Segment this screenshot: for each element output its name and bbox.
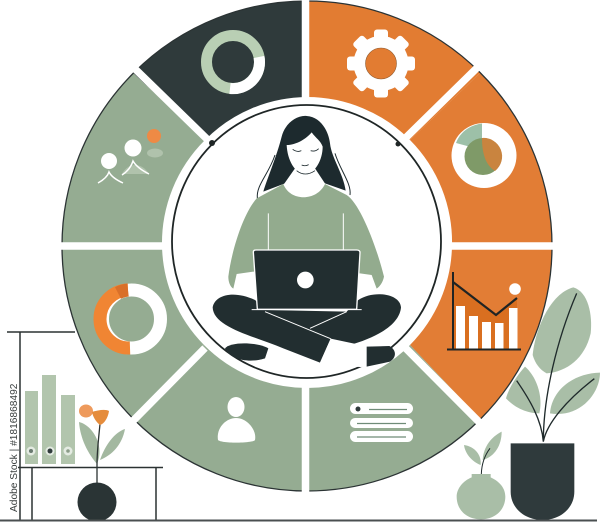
legs: [213, 294, 401, 363]
icon: orange segment donut pie: [452, 123, 516, 188]
bare foot: [320, 339, 368, 367]
flower stem: [97, 424, 100, 483]
large leaf: [533, 287, 591, 373]
face features: [293, 149, 319, 174]
leg fold lines: [265, 312, 347, 339]
icon: people: [98, 129, 163, 183]
segment: green bottom right: [307, 345, 480, 491]
right shoe: [367, 346, 395, 367]
icon: person: [218, 397, 255, 443]
watermark id text: Adobe Stock | #1816868492: [9, 383, 20, 512]
icon: donut left: [100, 290, 160, 348]
binder labels: [26, 446, 72, 456]
flower leaves: [79, 422, 99, 464]
woman with laptop: [213, 116, 401, 367]
large pot: [511, 443, 574, 520]
segment: orange upper right: [410, 73, 552, 246]
white separators: [55, 0, 560, 496]
laptop: [252, 250, 362, 310]
small vase: [457, 474, 505, 519]
icon: list rows: [350, 403, 413, 442]
inner circle: [172, 105, 441, 378]
neck and face: [283, 132, 326, 197]
left leaf: [506, 367, 540, 413]
hair outline: [257, 153, 350, 198]
left shoe: [225, 343, 268, 361]
hair: [263, 116, 346, 192]
shelf with binders and flower: [7, 332, 163, 522]
right leaf: [550, 373, 600, 414]
segment: orange top-right: [307, 1, 480, 140]
ground line: [0, 520, 597, 522]
binders: [25, 375, 75, 464]
ring outline: [62, 1, 552, 491]
round vase: [78, 482, 116, 522]
segment: green bottom left: [133, 345, 307, 491]
large and small potted plants: [457, 287, 600, 520]
small leaves: [464, 445, 481, 465]
shelf frame: [7, 332, 163, 520]
flower petals: [79, 404, 93, 418]
segment: orange lower right: [410, 246, 552, 419]
segment: green lower left: [62, 246, 204, 419]
sweater fold lines: [268, 213, 343, 250]
icon: bar and line chart: [447, 272, 521, 350]
icon: gear: [347, 30, 415, 98]
segment: green upper left: [62, 73, 205, 246]
sweater: [228, 184, 384, 289]
icon: dark segment donut: [206, 36, 260, 89]
panel: segmented ring: [55, 0, 560, 496]
segment: dark top-left: [133, 1, 307, 140]
stems: [517, 293, 594, 442]
